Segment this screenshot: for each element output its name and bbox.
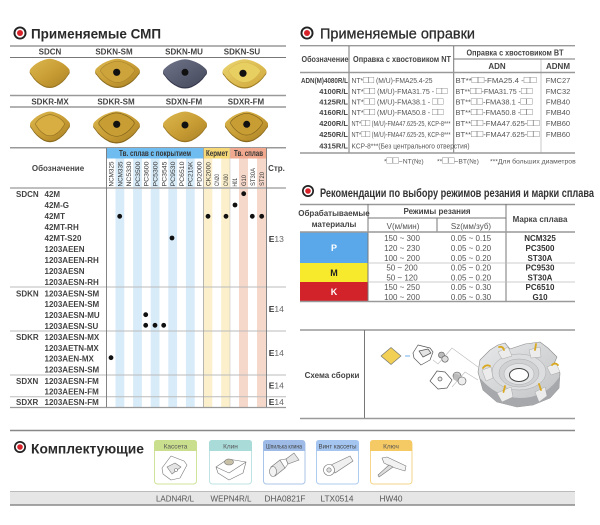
insert labels: SDKN-SU <box>224 48 260 56</box>
feed values <box>451 234 492 302</box>
recommendation headers: Sz(мм/зуб) <box>451 222 491 231</box>
group header: carbide <box>230 148 266 158</box>
BT holder column <box>456 75 540 140</box>
feed values: 0.05 ~ 0.15 <box>451 234 492 243</box>
row designations: 1203AESN-SM <box>44 290 100 298</box>
holder designations: 4100R/L <box>319 87 348 96</box>
card: wedge: Клин <box>223 444 238 450</box>
row designations: 1203AEEN-RH <box>44 256 99 265</box>
holder table headers <box>302 48 570 71</box>
row designations: 1203AESN-MU <box>44 311 100 320</box>
accessory part numbers bar: WEPN4R/L <box>210 494 252 504</box>
icon: section bullet <box>14 26 26 40</box>
insert type names <box>16 190 39 407</box>
page references <box>269 234 284 407</box>
holder designations <box>301 76 348 150</box>
BT holder column: BT**□□-FMA38.1 -□□ <box>456 96 532 108</box>
column labels: PC3600 <box>144 161 151 186</box>
accessory part numbers bar: LADN4R/L <box>156 494 195 504</box>
material band: M <box>300 263 368 282</box>
NT holder column: NT*□□ (M/U)-FMA50.8 - □□ <box>352 107 444 118</box>
material band: K <box>300 282 368 301</box>
holder table headers: Оправка с хвостовиком NT <box>353 55 451 64</box>
column labels: PD2000 <box>196 161 204 186</box>
insert labels: SDKN-MU <box>165 48 203 56</box>
column labels: ST20 <box>259 172 266 186</box>
page references: E14 <box>269 348 284 358</box>
insert: SDCN <box>30 59 70 88</box>
row designations: 42M-G <box>44 201 69 210</box>
card: cassette: Кассета <box>164 444 188 450</box>
availability dots <box>109 191 264 360</box>
BT holder column: BT**□□-FMA47.625-□□ <box>456 129 540 140</box>
BT holder column: BT**□□-FMA50.8 -□□ <box>456 107 532 118</box>
card: wedge screw: Шпилька клина <box>266 444 302 450</box>
row designations: 1203AESN <box>44 267 85 276</box>
insert labels: SDCN <box>39 48 62 56</box>
insert: SDKR-SM <box>93 111 140 143</box>
page references: E13 <box>269 234 284 244</box>
insert labels: SDXN-FM <box>166 98 203 106</box>
BT holder column: BT**□□-FMA25.4 -□□ <box>456 75 536 86</box>
column labels: PC215K <box>188 161 195 186</box>
material band: M: M <box>330 268 338 278</box>
icon: section bullet <box>302 185 314 197</box>
label: assembly scheme: Схема сборки <box>305 371 359 380</box>
recommendation headers: Марка сплава <box>513 215 568 224</box>
column labels: CN20 <box>214 174 221 186</box>
footnote: **□□−BT(№) <box>437 156 479 166</box>
holder table headers: Оправка с хвостовиком BT <box>466 48 564 58</box>
alloy grades: G10 <box>532 293 548 302</box>
alloy grades: PC3500 <box>526 244 555 253</box>
row designations: 42MT-RH <box>44 223 79 232</box>
row designations: 1203AEEN-FM <box>44 388 99 396</box>
column labels: PC3545 <box>161 161 168 186</box>
recommendation headers: материалы <box>312 220 357 229</box>
insert type names: SDKR <box>16 333 39 342</box>
feed values: 0.05 ~ 0.20 <box>451 264 492 272</box>
NT holder column: NT*□□ (M/U)-FMA38.1 - □□ <box>352 96 444 108</box>
ADNM column: FMC27 <box>546 76 570 85</box>
heading: accessories: Комплектующие <box>31 440 144 456</box>
accessory part numbers bar: DHA0821F <box>264 494 306 504</box>
insert labels: SDKR-MX <box>31 98 69 106</box>
ADNM column: FMC32 <box>546 87 570 96</box>
icon: screw <box>438 352 448 362</box>
group header: coated carbide: Тв. сплав с покрытием <box>119 149 191 158</box>
ADNM column: FMB40 <box>546 98 570 106</box>
heading: holders: Применяемые оправки <box>320 26 475 42</box>
insert: SDKN-SM <box>95 59 140 88</box>
insert labels: SDXR-FM <box>228 98 265 106</box>
alloy grades: ST30A <box>528 274 553 282</box>
cutting speed values: 120 ~ 230 <box>384 244 420 253</box>
card: wedge <box>209 440 252 484</box>
icon: wedge screw <box>453 372 466 385</box>
alloy grades: NCM325 <box>524 234 556 243</box>
page references: E14 <box>269 304 284 314</box>
row designations: 1203AESN-SM <box>44 366 100 374</box>
holder designations: ADN(M)4080R/L <box>301 76 348 85</box>
insert type names: SDKN <box>16 290 39 298</box>
icon: insert <box>381 348 401 364</box>
insert type names: SDXR <box>16 398 38 407</box>
icon: section bullet <box>300 26 314 40</box>
accessory part numbers bar <box>10 492 575 505</box>
panel: assembly diagram <box>300 330 575 418</box>
feed values: 0.05 ~ 0.20 <box>451 244 492 253</box>
page references: E14 <box>269 397 284 407</box>
insert: SDKN-SU <box>222 59 266 88</box>
leader lines <box>405 348 478 387</box>
column labels <box>108 161 266 186</box>
insert: SDXR-FM <box>225 112 268 142</box>
cutting speed values: 50 ~ 120 <box>386 274 418 282</box>
group header: cermet: Кермет <box>206 149 228 158</box>
row designations: 42M <box>44 190 60 199</box>
holder designations: 4315R/L <box>319 142 348 150</box>
cutting speed values: 100 ~ 200 <box>384 254 420 263</box>
column labels: G10 <box>241 175 248 186</box>
accessory part numbers bar: HW40 <box>380 494 403 504</box>
column labels: PC3500 <box>135 161 142 186</box>
cutting speed values <box>384 234 420 302</box>
column stripes <box>116 158 266 407</box>
card: cassette screw: Винт кассеты <box>318 444 357 450</box>
NT holder column: KCP-8***(Без центрального отверстия) <box>352 142 470 150</box>
column labels: PC6510 <box>179 161 186 186</box>
icon: section bullet <box>14 441 26 453</box>
insert: SDKR-MX <box>30 112 70 142</box>
row designations: 1203AESN-SU <box>44 322 99 331</box>
cutting speed values: 150 ~ 300 <box>384 234 420 243</box>
column labels: ST30A <box>250 167 257 186</box>
NT holder column: NT*□□ (M/U)-FMA31.75 - □□ <box>352 86 448 97</box>
icon: milling cutter <box>478 342 560 407</box>
ADNM column: FMB60 <box>546 119 570 128</box>
group header: carbide: Тв. сплав <box>234 149 263 158</box>
NT holder column: NT*□□ (M/U)-FMA47.625-25, KCP-8*** <box>352 118 451 129</box>
row designations: 42MT-S20 <box>44 234 82 243</box>
column labels: NCM335 <box>117 161 124 186</box>
row designations: 1203AESN-MX <box>44 333 100 342</box>
icon: wedge <box>430 371 452 389</box>
card: key <box>370 440 412 484</box>
NT holder column: NT*□□ (M/U)-FMA47.625-25, KCP-8*** <box>352 129 451 140</box>
column labels: PC5300 <box>152 161 160 186</box>
row designations: 1203AEEN <box>44 245 85 254</box>
row designations: 1203AESN-RH <box>44 278 99 287</box>
footnote: ***Для больших диаметров <box>490 158 576 166</box>
holder table headers: ADN <box>488 62 506 71</box>
page references: E14 <box>269 380 284 390</box>
feed values: 0.05 ~ 0.30 <box>451 293 492 302</box>
card: cassette <box>154 440 197 484</box>
ADNM column: FMB60 <box>546 130 570 139</box>
alloy grades: PC6510 <box>526 283 555 292</box>
holder designations: 4200R/L <box>319 119 348 128</box>
holder table headers: Обозначение <box>302 55 349 64</box>
card: wedge screw <box>263 440 305 484</box>
panel: applicable inserts <box>10 26 286 143</box>
footnote: *□□−NT(№) <box>384 156 424 166</box>
recommendation headers: V(м/мин) <box>387 222 420 231</box>
row designations: 1203AEEN-SM <box>44 300 100 309</box>
panel: accessories <box>10 430 575 505</box>
header: page: Стр. <box>268 164 285 173</box>
BT holder column: BT**□□-FMA47.625-□□ <box>456 118 540 129</box>
panel: grade table <box>10 147 286 408</box>
insert type names: SDCN <box>16 190 39 199</box>
accessory part numbers bar: LTX0514 <box>320 494 354 504</box>
recommendation headers <box>298 207 568 231</box>
material band: P <box>300 232 368 263</box>
cutting speed values: 150 ~ 250 <box>384 283 420 292</box>
ADNM column: FMB40 <box>546 108 570 117</box>
recommendation headers: Обрабатываемые <box>298 209 370 218</box>
row designations: 1203AESN-FM <box>44 398 99 407</box>
column labels: NCM325 <box>108 161 116 186</box>
material band: P: P <box>331 243 337 253</box>
row designations: 1203AEN-MX <box>44 354 95 364</box>
recommendation headers: Режимы резания <box>403 207 471 216</box>
column labels: H01 <box>232 178 239 186</box>
row designations <box>44 190 100 407</box>
holder designations: 4250R/L <box>319 130 348 139</box>
header: designation: Обозначение <box>32 164 85 173</box>
BT holder column: BT**□□-FMA31.75 -□□ <box>456 86 532 97</box>
heading: inserts: Применяемые СМП <box>31 26 161 42</box>
alloy grades <box>524 234 556 302</box>
row designations: 1203AETN-MX <box>44 344 99 353</box>
insert labels: SDKN-SM <box>95 48 133 56</box>
panel: cutting recommendations <box>298 185 594 302</box>
column labels: PC9530 <box>170 161 177 186</box>
card: cassette screw <box>316 440 359 484</box>
row designations: 1203AESN-FM <box>44 377 99 386</box>
alloy grades: ST30A <box>528 254 553 263</box>
column labels: CK2000 <box>205 162 212 186</box>
holder designations: 4125R/L <box>319 98 348 106</box>
feed values: 0.05 ~ 0.20 <box>451 274 492 282</box>
insert labels <box>31 48 265 106</box>
ADNM column <box>546 76 570 139</box>
cutting speed values: 50 ~ 200 <box>386 264 418 272</box>
column labels: CN30 <box>223 174 230 186</box>
row designations: 42MT <box>44 212 65 221</box>
card: key: Ключ <box>383 444 399 450</box>
icon: cassette <box>413 345 433 365</box>
material band: K: K <box>331 287 338 297</box>
panel: applicable holders <box>300 26 576 166</box>
feed values: 0.05 ~ 0.20 <box>451 254 492 263</box>
group header: cermet <box>204 148 230 158</box>
insert type names: SDXN <box>16 377 38 386</box>
alloy grades: PC9530 <box>526 264 555 272</box>
insert: SDKN-MU <box>163 59 207 88</box>
cutting speed values: 100 ~ 200 <box>384 293 420 302</box>
NT holder column <box>352 75 470 150</box>
NT holder column: NT*□□ (M/U)-FMA25.4-25 <box>352 75 432 86</box>
feed values: 0.05 ~ 0.30 <box>451 283 492 292</box>
holder designations: 4160R/L <box>319 108 348 117</box>
column labels: NC5330 <box>126 161 133 186</box>
insert labels: SDKR-SM <box>97 98 135 106</box>
insert: SDXN-FM <box>163 112 207 142</box>
holder table headers: ADNM <box>546 62 570 71</box>
